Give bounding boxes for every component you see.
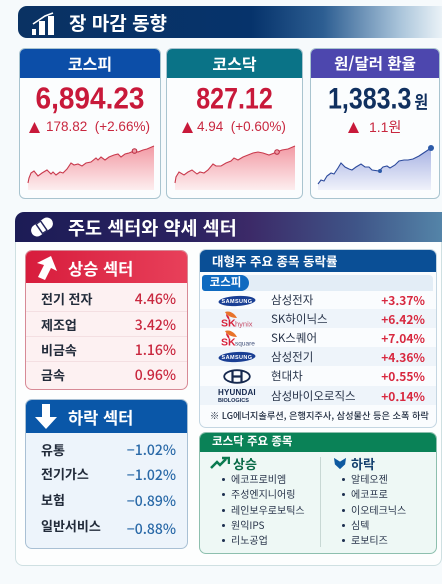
panel header (199, 249, 437, 272)
row: −1.02% (127, 465, 176, 485)
logo: Samsung: SAMSUNG (222, 299, 252, 305)
logo: Hyundai Biologics (218, 388, 256, 404)
stock row: Hyundai Motor: 현대차 (271, 368, 303, 384)
stock row: SK hynix: SK하이닉스 (271, 311, 328, 327)
rate value: 1,383.3원 (328, 82, 428, 115)
panel: large-cap movers (199, 249, 437, 428)
stock row: Samsung Electro-Mechanics: 삼성전기 (271, 349, 313, 365)
stock row: SK hynix: +6.42% (381, 311, 425, 328)
list item: 주성엔지니어링 (231, 486, 295, 501)
row (26, 336, 187, 362)
line chart (174, 146, 296, 190)
card header: 코스닥 (212, 51, 257, 75)
stock row: SK hynix (200, 309, 436, 328)
list item: 에코프로 (351, 486, 388, 501)
stock row: SK Square (221, 330, 425, 347)
row: 전기가스 (41, 464, 89, 483)
section header: sectors (15, 212, 442, 242)
row: 0.96% (135, 365, 176, 385)
panel header: 코스닥 주요 종목 (212, 433, 292, 449)
logo: SK hynix (221, 312, 253, 328)
change text: 178.82 (+2.66%) (46, 119, 150, 134)
row: 일반서비스 (41, 516, 101, 535)
icon: bar chart (32, 12, 54, 35)
column divider (320, 457, 321, 547)
row (41, 464, 176, 485)
stock row: Samsung Electronics: +3.37% (381, 292, 425, 309)
heading: 주도 섹터와 약세 섹터 (68, 215, 237, 241)
icon: up triangle (348, 122, 359, 133)
column: rising (210, 454, 305, 547)
list item: 알테오젠 (351, 471, 388, 486)
title: 상승 섹터 (68, 256, 133, 280)
stock row: Samsung Electro-Mechanics: +4.36% (381, 349, 425, 366)
row: −0.89% (127, 491, 176, 511)
title: 하락 섹터 (68, 405, 133, 429)
icon: up trend (210, 456, 230, 469)
footnote: ※ LG에너지솔루션, 은행지주사, 삼성물산 등은 소폭 하락 (210, 408, 429, 422)
logo: Samsung (218, 352, 256, 362)
card header (167, 49, 302, 78)
row: −1.02% (127, 440, 176, 460)
stock row: Samsung Electronics: 삼성전자 (271, 292, 313, 308)
panel: KRW/USD (310, 48, 440, 199)
change text: 4.94 (+0.60%) (197, 119, 286, 134)
row: 유통 (41, 440, 65, 459)
list item: 에코프로비엠 (231, 471, 286, 486)
row: 전기 전자 (41, 289, 92, 308)
panel: sectors container (15, 238, 442, 566)
panel: KOSPI (19, 48, 161, 199)
logo: Hyundai Biologics: HYUNDAI (218, 388, 256, 397)
logo: SK square (221, 330, 255, 347)
list item: 이오테크닉스 (351, 502, 406, 517)
icon: up triangle (182, 122, 193, 133)
logo: Hyundai (223, 369, 251, 384)
icon: down arrow (35, 404, 57, 429)
stock row: SK Square: +7.04% (381, 330, 425, 347)
tab: KOSPI (202, 275, 249, 291)
panel: KOSDAQ (166, 48, 303, 199)
panel header (25, 250, 188, 283)
change (182, 119, 286, 134)
list item: 원익IPS (231, 517, 265, 532)
stock row: Hyundai Motor (223, 368, 425, 385)
logo: Hyundai Biologics: BIOLOGICS (218, 398, 249, 404)
list item: 리노공업 (231, 532, 268, 547)
stock row: Samsung Biologics (200, 386, 436, 405)
list item: 심텍 (351, 517, 369, 532)
row (41, 490, 176, 511)
row (41, 440, 176, 460)
line chart (28, 146, 154, 190)
icon: down arrow (334, 458, 346, 470)
row (41, 289, 176, 309)
row: 3.42% (135, 315, 176, 335)
stock row: Samsung Biologics: 삼성바이오로직스 (271, 388, 356, 404)
card header: 코스피 (68, 51, 112, 75)
list item: 로보티즈 (351, 532, 388, 547)
change text: 1.1원 (369, 117, 401, 137)
stock row: Samsung Electronics (218, 292, 425, 309)
panel header: 대형주 주요 종목 동락률 (212, 251, 338, 270)
heading: 장 마감 동향 (69, 9, 167, 36)
panel: falling sectors (25, 399, 188, 549)
label: 상승 (233, 454, 257, 473)
row: −0.88% (127, 519, 176, 539)
panel header (25, 399, 188, 433)
row: 제조업 (41, 315, 77, 334)
stock row: SK Square: SK스퀘어 (271, 330, 317, 346)
panel: KOSDAQ movers (199, 432, 437, 554)
icon: pill tag (31, 218, 53, 236)
row: 1.16% (135, 340, 176, 360)
card header (311, 49, 439, 78)
row: 보험 (41, 490, 65, 509)
index value: 827.12 (196, 82, 273, 115)
tab: KOSPI: 코스피 (210, 274, 241, 290)
row: 4.46% (135, 289, 176, 309)
change (348, 117, 401, 137)
card header: 원/달러 환율 (334, 52, 416, 74)
icon: up triangle (29, 122, 40, 133)
section header: market close (18, 6, 442, 38)
icon: up arrow (37, 256, 57, 280)
row: 비금속 (41, 340, 77, 359)
stock row: Samsung Biologics: +0.14% (381, 388, 425, 405)
column: falling (334, 454, 406, 547)
panel: rising sectors (25, 250, 188, 390)
row (26, 311, 187, 337)
change (29, 119, 150, 134)
stock row: Samsung Electro-Mechanics (200, 347, 436, 366)
panel header (199, 432, 437, 452)
label: 하락 (351, 454, 375, 473)
card header (20, 49, 160, 78)
row (26, 361, 187, 387)
KOSPI tab band (203, 275, 433, 291)
logo: Samsung: SAMSUNG (222, 355, 252, 361)
row (41, 516, 176, 539)
stock row: Hyundai Motor: +0.55% (381, 368, 425, 385)
logo: Samsung (218, 296, 256, 306)
list item: 레인보우로보틱스 (231, 502, 305, 517)
line chart (318, 145, 434, 190)
row: 금속 (41, 365, 65, 384)
index value: 6,894.23 (36, 82, 144, 115)
